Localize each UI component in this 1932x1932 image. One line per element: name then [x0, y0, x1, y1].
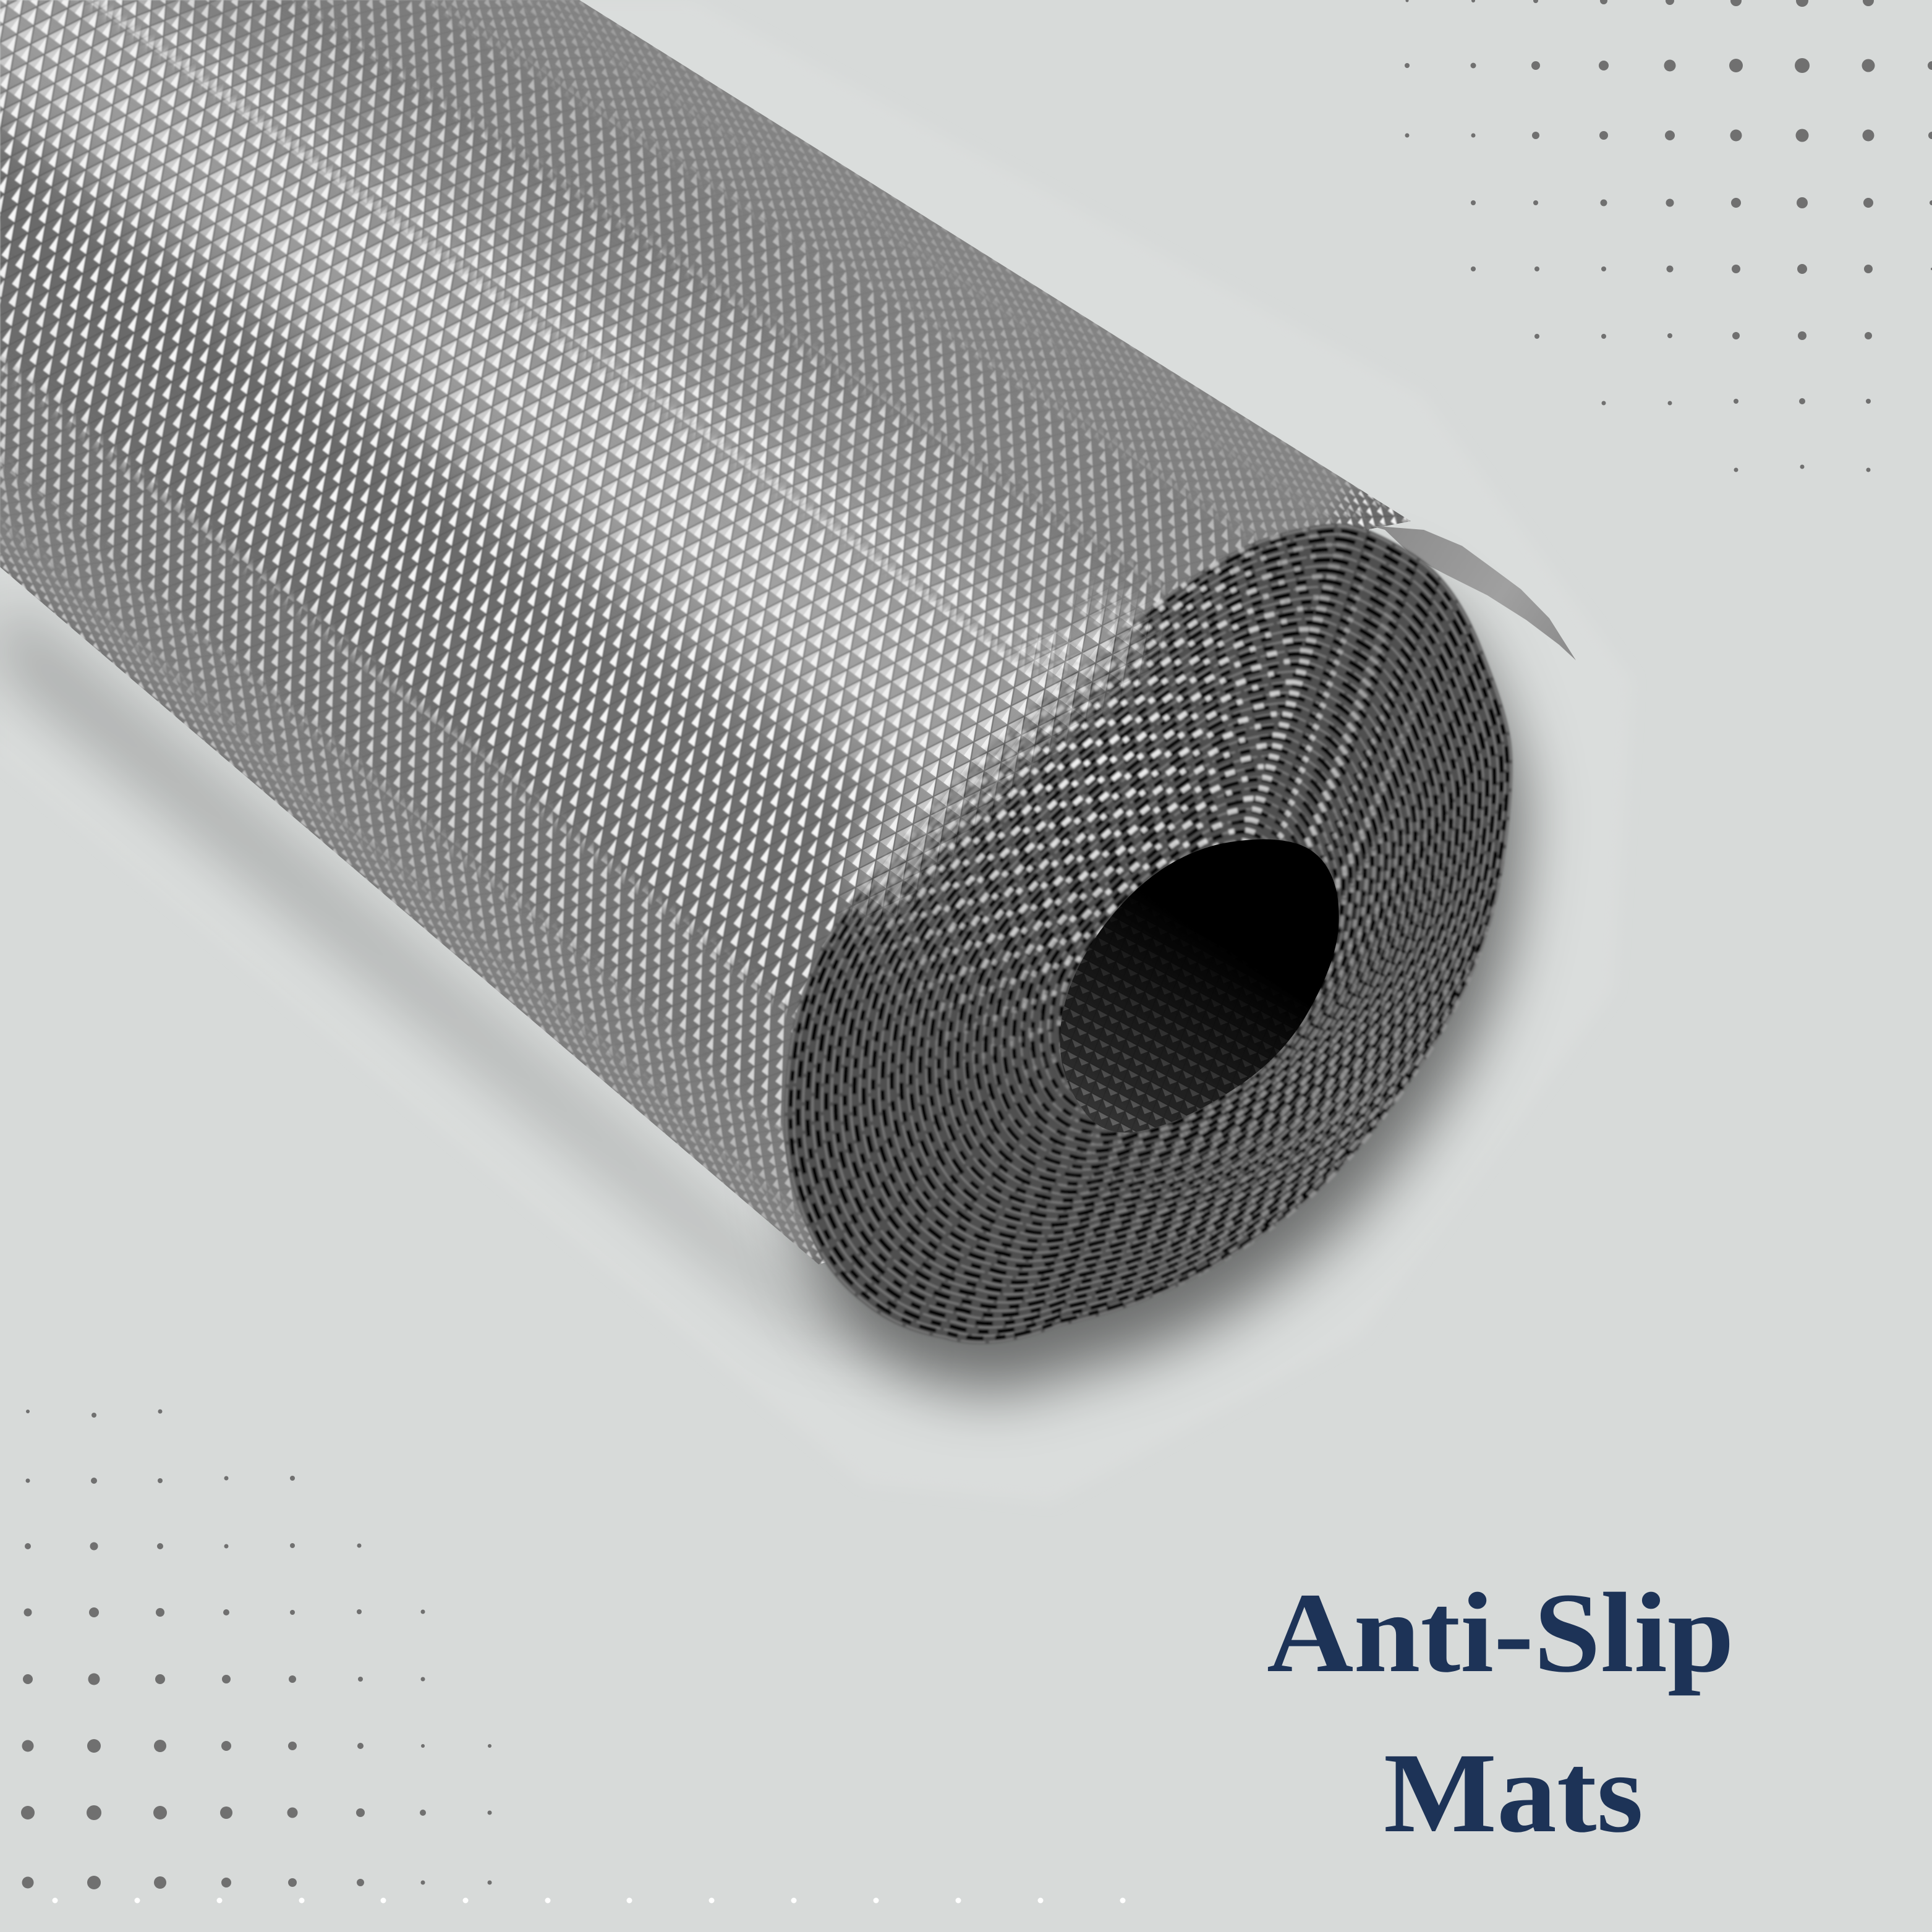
rolled mat body: [0, 0, 1411, 1264]
lower right lit scales: [786, 526, 1511, 1342]
ring lines: [786, 526, 1511, 1342]
halo behind roll: [0, 0, 1632, 1502]
title: [1267, 1570, 1734, 1857]
mat texture: [0, 0, 1411, 1264]
title: Anti-Slip: [1267, 1570, 1734, 1696]
roll shadow: [0, 570, 1521, 1390]
cap edge blending into body: [742, 556, 1236, 989]
highlighted scales: [786, 526, 1511, 1342]
dark gaps between scales: [791, 531, 1507, 1338]
loose mat flap: [1369, 526, 1576, 660]
white dot row: [52, 1898, 1125, 1903]
dot grid: bottom left: [21, 1410, 492, 1889]
rolled end spiral: [784, 524, 1512, 1344]
title: Mats: [1384, 1730, 1643, 1857]
lengthwise shading: [0, 0, 1363, 1258]
roll core hole: [1060, 840, 1339, 1133]
dot grid: top right: [1405, 0, 1932, 472]
